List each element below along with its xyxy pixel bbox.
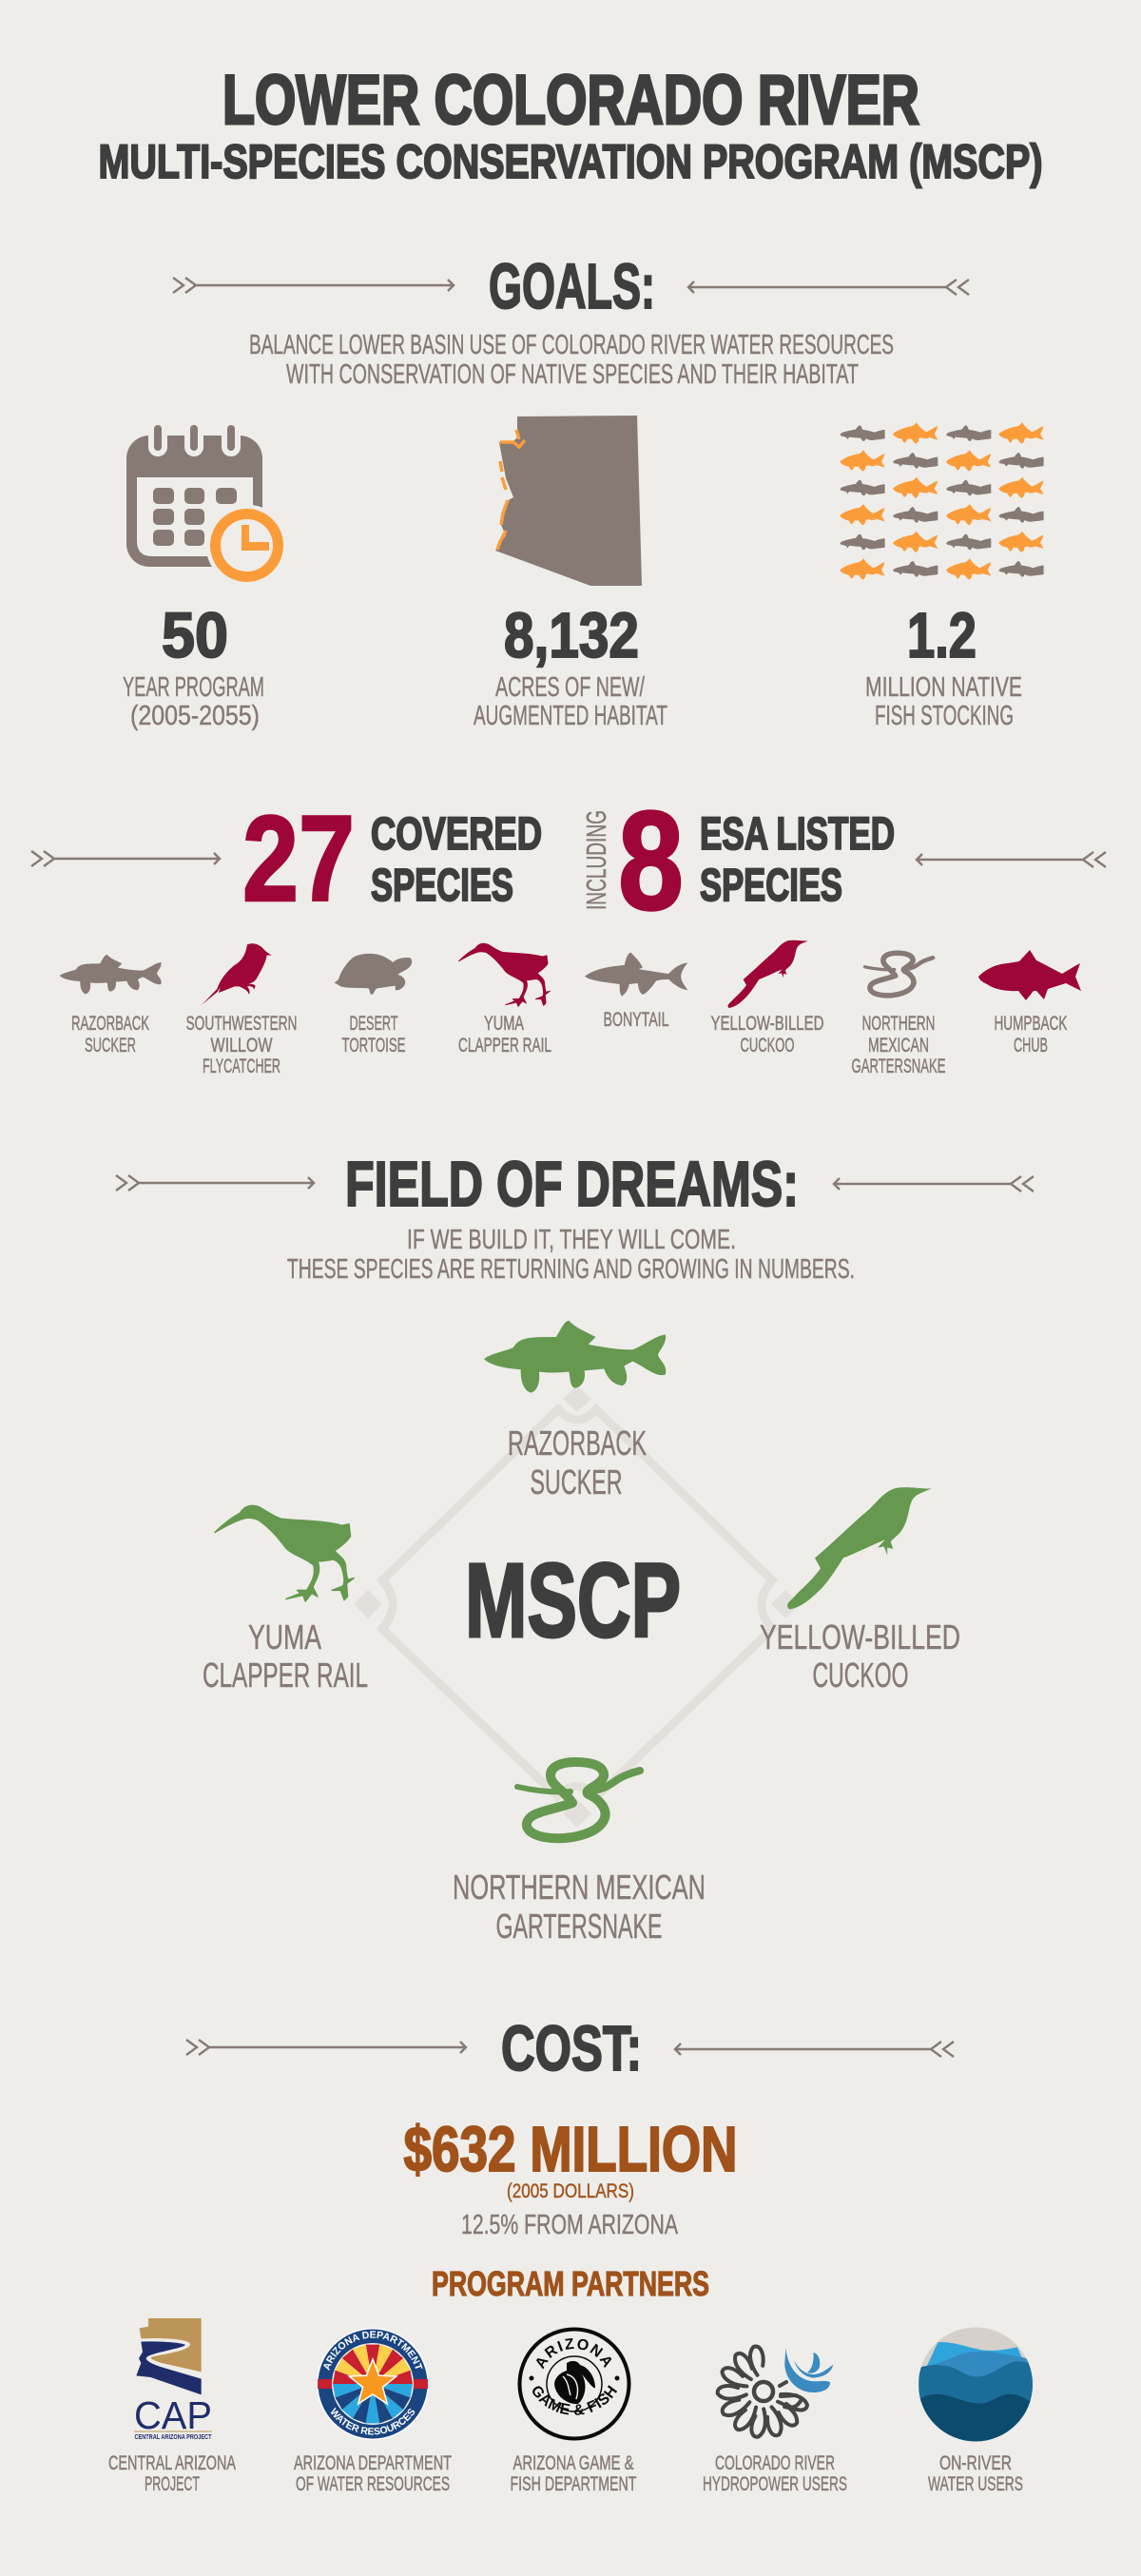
yellow-billed cuckoo green [760, 1487, 960, 1695]
arrow: goals right [688, 280, 969, 295]
partner: arizona department of water resources: OF WATER RESOURCES [296, 2473, 450, 2495]
stat: 50 years: (2005-2055) [130, 701, 260, 731]
partner: arizona game and fish: ARIZONA GAME & [513, 2452, 633, 2474]
icon: calendar with clock [126, 425, 287, 586]
species: yellow-billed cuckoo: CUCKOO [740, 1035, 795, 1056]
partner: on-river water users [919, 2328, 1033, 2491]
stat: 50 years: YEAR PROGRAM [123, 672, 264, 703]
arrow: species right [917, 852, 1106, 867]
heading: field of dreams: FIELD OF DREAMS: [345, 1149, 799, 1220]
species: yuma clapper rail [458, 943, 551, 1056]
arrow: field left [116, 1175, 314, 1191]
partner: arizona game and fish [510, 2328, 637, 2495]
esa listed species label: SPECIES [700, 861, 842, 911]
species: northern mexican gartersnake: MEXICAN [868, 1035, 929, 1056]
field description: THESE SPECIES ARE RETURNING AND GROWING IN NUMBERS. [287, 1254, 855, 1285]
species: northern mexican gartersnake [852, 953, 945, 1077]
esa listed species label: ESA LISTED [700, 809, 895, 860]
arrow: species left [31, 851, 220, 866]
arrow: field right [834, 1176, 1034, 1191]
species: bonytail: BONYTAIL [603, 1009, 669, 1031]
species: southwestern willow flycatcher: WILLOW [211, 1035, 273, 1056]
species: northern mexican gartersnake: GARTERSNAKE [852, 1056, 945, 1077]
logo: cap: CENTRAL ARIZONA PROJECT [135, 2434, 212, 2441]
heading: goals: GOALS: [489, 251, 655, 322]
species: razorback sucker: SUCKER [85, 1035, 136, 1056]
center label: MSCP: MSCP [465, 1542, 681, 1659]
logo: cap: CAP [134, 2393, 212, 2437]
logo: adwr [317, 2328, 429, 2440]
panel: program partners [108, 2264, 1033, 2495]
partner: colorado river hydropower users: HYDROPOWER USERS [703, 2473, 847, 2495]
yuma clapper rail green: CLAPPER RAIL [203, 1656, 368, 1695]
stat: 1.2 million fish: FISH STOCKING [875, 701, 1014, 731]
yellow-billed cuckoo green: CUCKOO [812, 1656, 909, 1695]
panel: covered species [31, 783, 1106, 1077]
including vertical label: INCLUDING [582, 810, 612, 910]
northern mexican gartersnake green [453, 1762, 706, 1946]
species: southwestern willow flycatcher: SOUTHWESTERN [186, 1013, 297, 1035]
arrow: goals left [173, 278, 454, 293]
species: humpback chub [978, 950, 1081, 1056]
partner: arizona department of water resources [293, 2328, 452, 2495]
stat: 1.2 million fish: MILLION NATIVE [865, 672, 1022, 703]
panel: goals [123, 251, 1044, 731]
partner: on-river water users: WATER USERS [928, 2473, 1023, 2495]
partner: on-river water users: ON-RIVER [939, 2452, 1012, 2474]
species: desert tortoise [335, 954, 412, 1056]
partner: arizona department of water resources: ARIZONA DEPARTMENT [294, 2452, 452, 2474]
stat: 8,132 acres: 8,132 [504, 600, 639, 671]
arrow: cost left [186, 2040, 466, 2055]
heading: cost: COST: [501, 2013, 642, 2084]
goals description: WITH CONSERVATION OF NATIVE SPECIES AND THEIR HABITAT [286, 359, 859, 390]
species: yellow-billed cuckoo [711, 940, 823, 1056]
razorback sucker green [484, 1321, 666, 1501]
logo: cap [134, 2318, 212, 2441]
stat: 1.2 million fish: 1.2 [907, 600, 977, 671]
razorback sucker green: RAZORBACK [508, 1424, 647, 1462]
northern mexican gartersnake green: GARTERSNAKE [496, 1907, 662, 1946]
icon: arizona map [495, 416, 642, 586]
razorback sucker green: SUCKER [531, 1462, 622, 1501]
stat: 50 years [123, 600, 264, 731]
covered species label [371, 809, 542, 911]
species: yellow-billed cuckoo: YELLOW-BILLED [711, 1013, 823, 1035]
species: southwestern willow flycatcher [186, 943, 297, 1077]
partner: colorado river hydropower users [703, 2346, 847, 2495]
heading: program partners: PROGRAM PARTNERS [432, 2264, 709, 2303]
covered species label: SPECIES [371, 861, 513, 911]
yuma clapper rail green: YUMA [248, 1617, 321, 1656]
panel: cost [186, 2013, 954, 2240]
field description: IF WE BUILD IT, THEY WILL COME. [407, 1225, 736, 1255]
logo: adwr: ARIZONA DEPARTMENT [323, 2331, 422, 2371]
main title: LOWER COLORADO RIVER [222, 62, 919, 139]
species: southwestern willow flycatcher: FLYCATCHER [203, 1056, 280, 1077]
cost figure: $632 MILLION [403, 2114, 738, 2185]
esa listed species label [700, 809, 895, 911]
logo: game and fish: ARIZONA [536, 2337, 612, 2370]
number: 27: 27 [242, 791, 355, 927]
stat: 1.2 million fish [865, 600, 1022, 731]
yuma clapper rail green [203, 1505, 368, 1695]
goals description [249, 330, 894, 390]
baseball diamond [354, 1385, 800, 1828]
stat: 50 years: 50 [162, 600, 228, 671]
icon: fish grid [840, 422, 1044, 580]
field description [287, 1225, 855, 1285]
species: desert tortoise: DESERT [350, 1013, 398, 1035]
cost note: (2005 DOLLARS) [507, 2180, 634, 2202]
logo: hydropower flower [717, 2346, 833, 2438]
stat: 8,132 acres: AUGMENTED HABITAT [474, 701, 667, 731]
species: yuma clapper rail: YUMA [484, 1013, 524, 1035]
northern mexican gartersnake green: NORTHERN MEXICAN [453, 1868, 706, 1907]
species: bonytail [585, 953, 687, 1031]
title [99, 62, 1042, 188]
number: 8: 8 [618, 783, 684, 939]
logo: adwr: WATER RESOURCES [331, 2408, 415, 2434]
logo: on-river circle [919, 2328, 1033, 2442]
species: razorback sucker: RAZORBACK [71, 1013, 149, 1035]
species: humpback chub: CHUB [1014, 1035, 1048, 1056]
species: yuma clapper rail: CLAPPER RAIL [458, 1035, 551, 1056]
partner: arizona game and fish: FISH DEPARTMENT [510, 2473, 637, 2495]
species: humpback chub: HUMPBACK [995, 1013, 1067, 1035]
stat: 8,132 acres [474, 600, 667, 731]
stat: 8,132 acres: ACRES OF NEW/ [495, 672, 646, 703]
partner: central arizona project: CENTRAL ARIZONA [108, 2452, 236, 2474]
species: razorback sucker [60, 955, 162, 1056]
partner: central arizona project [108, 2318, 236, 2495]
logo: game and fish: GAME & FISH [532, 2385, 618, 2415]
covered species label: COVERED [371, 809, 542, 860]
partner: colorado river hydropower users: COLORADO RIVER [715, 2452, 835, 2474]
arizona share: 12.5% FROM ARIZONA [461, 2210, 678, 2240]
partner: central arizona project: PROJECT [145, 2473, 200, 2495]
species: desert tortoise: TORTOISE [342, 1035, 405, 1056]
panel: field of dreams [116, 1149, 1034, 1946]
yellow-billed cuckoo green: YELLOW-BILLED [760, 1617, 960, 1656]
logo: game and fish [517, 2328, 631, 2440]
arrow: cost right [675, 2042, 954, 2057]
species: northern mexican gartersnake: NORTHERN [861, 1013, 936, 1035]
